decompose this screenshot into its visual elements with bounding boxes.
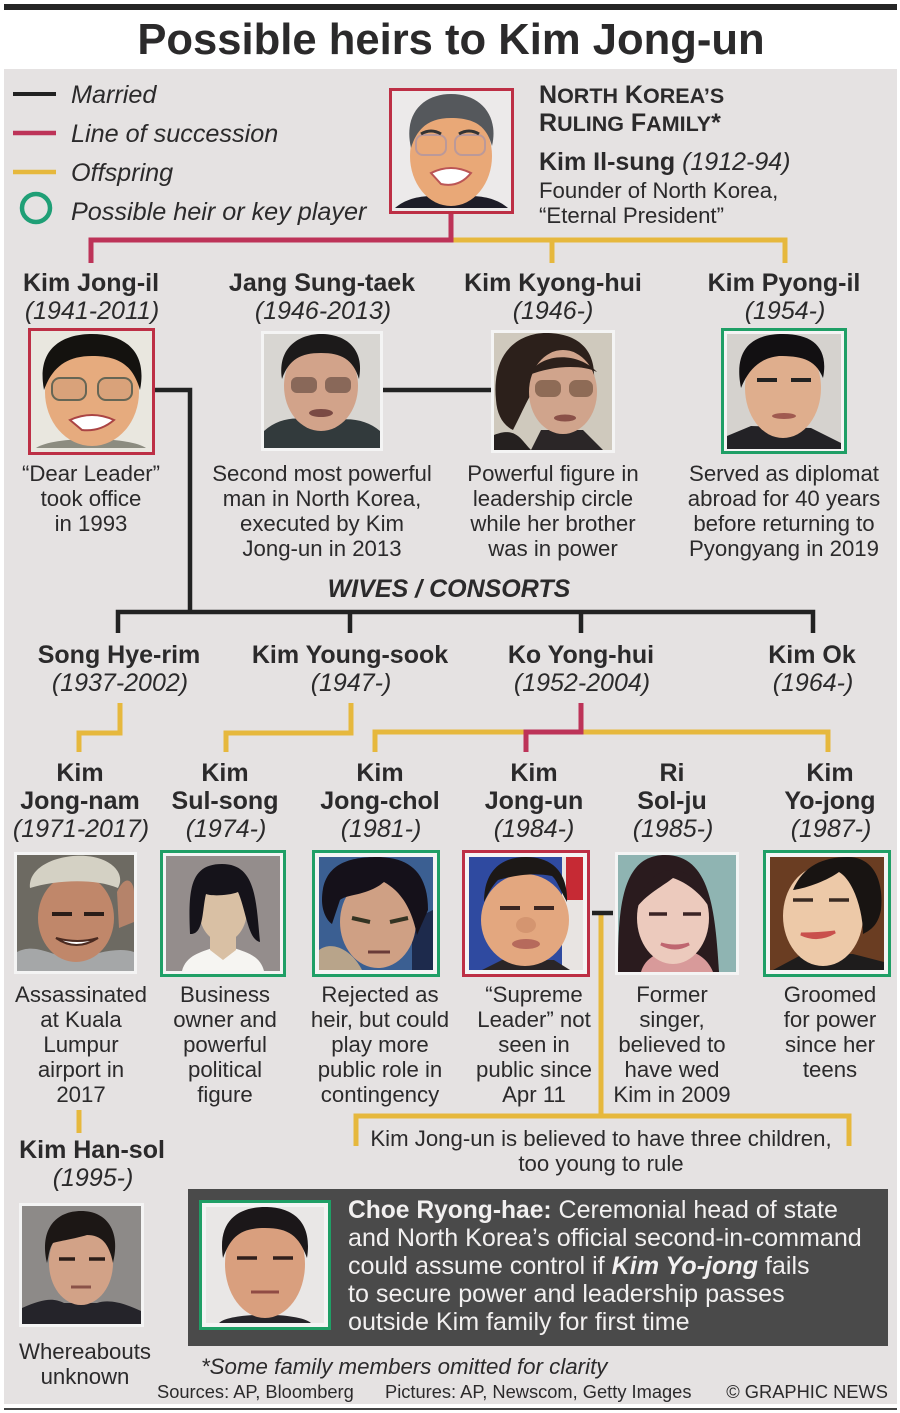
person: Kim Kyong-hui: while her brother	[469, 511, 636, 536]
legend	[13, 81, 368, 226]
wife: Song Hye-rim: (1937-2002)	[52, 669, 188, 697]
photo: Kim Jong-chol	[314, 852, 438, 976]
person: Ri Sol-ju: Former	[636, 982, 708, 1007]
person: Ri Sol-ju: Kim in 2009	[613, 1082, 731, 1107]
note: Kim Jong-un's children: Kim Jong-un is believed to have three children,	[370, 1126, 832, 1151]
person: Kim Jong-il: in 1993	[55, 511, 127, 536]
person: Kim Jong-il: Kim Jong-il	[23, 269, 159, 297]
photo: Kim Jong-un	[464, 852, 588, 976]
person: Jang Sung-taek: (1946-2013)	[255, 297, 391, 325]
person: Kim Sul-song: (1974-)	[186, 815, 266, 843]
person: Ri Sol-ju: believed to	[618, 1032, 726, 1057]
panel: Choe Ryong-hae: could assume control if Kim Yo-jong fails	[348, 1252, 810, 1280]
person: Kim Jong-un: Apr 11	[502, 1082, 566, 1107]
photo: Kim Kyong-hui	[491, 330, 615, 453]
panel: Choe Ryong-hae	[188, 1189, 888, 1346]
text: Kim Il-sung: “Eternal President”	[539, 203, 724, 228]
person: Kim Jong-chol: Rejected as	[321, 982, 439, 1007]
person: Kim Jong-un: Kim	[510, 759, 558, 787]
person: Kim Jong-chol: public role in	[318, 1057, 442, 1082]
person: Kim Jong-un: seen in	[498, 1032, 570, 1057]
person: Kim Jong-nam: 2017	[56, 1082, 106, 1107]
person: Kim Jong-il: took office	[41, 486, 141, 511]
person: Kim Sul-song: owner and	[173, 1007, 277, 1032]
person: Kim Pyong-il: Kim Pyong-il	[708, 269, 860, 297]
person: Kim Jong-nam: Lumpur	[43, 1032, 119, 1057]
person: Kim Jong-un: public since	[476, 1057, 592, 1082]
heading: North Korea's ruling family: RULING FAMILY*	[539, 109, 721, 137]
person: Kim Han-sol: Kim Han-sol	[19, 1136, 165, 1164]
note: Kim Jong-un's children	[370, 1126, 832, 1176]
panel: Choe Ryong-hae: Choe Ryong-hae: Ceremonial head of state	[348, 1196, 838, 1224]
wife: Ko Yong-hui: (1952-2004)	[514, 669, 650, 697]
person: Kim Kyong-hui: leadership circle	[473, 486, 633, 511]
person: Kim Pyong-il	[688, 269, 880, 561]
person: Kim Jong-un	[464, 759, 592, 1107]
person: Kim Jong-il: “Dear Leader”	[22, 461, 160, 486]
text: Kim Il-sung	[539, 148, 790, 228]
sources and credits: Pictures: AP, Newscom, Getty Images	[385, 1381, 692, 1402]
person: Kim Jong-un: Jong-un	[485, 787, 583, 815]
photo: Jang Sung-taek	[261, 331, 383, 451]
photo: Kim Sul-song silhouette	[162, 852, 284, 976]
person: Kim Kyong-hui: was in power	[487, 536, 618, 561]
person: Kim Sul-song: political	[188, 1057, 262, 1082]
person: Kim Yo-jong: Yo-jong	[784, 787, 876, 815]
photo: Kim Pyong-il	[722, 330, 846, 452]
person: Kim Pyong-il: abroad for 40 years	[688, 486, 880, 511]
sources and credits	[157, 1381, 888, 1402]
sources and credits: © GRAPHIC NEWS	[726, 1381, 888, 1402]
legend: Married	[71, 81, 157, 109]
person: Kim Han-sol: (1995-)	[53, 1164, 133, 1192]
photo: Kim Han-sol	[19, 1203, 144, 1327]
wife: Kim Ok	[768, 641, 856, 697]
person: Kim Jong-chol: play more	[331, 1032, 429, 1057]
person: Kim Jong-nam: Kim	[56, 759, 104, 787]
person: Kim Kyong-hui: Powerful figure in	[467, 461, 639, 486]
person: Kim Pyong-il: before returning to	[693, 511, 875, 536]
person: Jang Sung-taek: Jong-un in 2013	[242, 536, 402, 561]
person: Kim Yo-jong: (1987-)	[791, 815, 871, 843]
person: Ri Sol-ju: Sol-ju	[637, 787, 707, 815]
wife: Ko Yong-hui	[508, 641, 654, 697]
person: Kim Jong-nam: Assassinated	[15, 982, 147, 1007]
person: Kim Pyong-il: Served as diplomat	[689, 461, 879, 486]
photo: Kim Il-sung	[390, 90, 512, 212]
person: Jang Sung-taek: executed by Kim	[240, 511, 404, 536]
wife: Ko Yong-hui: Ko Yong-hui	[508, 641, 654, 669]
person: Ri Sol-ju: singer,	[639, 1007, 705, 1032]
photo: Kim Jong-il	[30, 330, 154, 454]
person: Jang Sung-taek	[212, 269, 432, 561]
person: Kim Jong-nam: at Kuala	[40, 1007, 122, 1032]
text: Kim Il-sung: Kim Il-sung (1912-94)	[539, 148, 790, 176]
person: Kim Jong-chol: heir, but could	[311, 1007, 449, 1032]
note: Kim Jong-un's children: too young to rule	[518, 1151, 684, 1176]
person: Kim Pyong-il: (1954-)	[745, 297, 825, 325]
person: Kim Jong-un: (1984-)	[494, 815, 574, 843]
photo: Ri Sol-ju	[615, 852, 739, 975]
heading: North Korea's ruling family	[539, 81, 724, 137]
connector lines: married	[118, 390, 813, 913]
person: Kim Jong-nam: (1971-2017)	[13, 815, 149, 843]
person: Kim Sul-song	[162, 759, 284, 1107]
person: Kim Kyong-hui	[464, 269, 642, 561]
person: Kim Jong-il	[22, 269, 160, 536]
person: Kim Jong-un: Leader” not	[477, 1007, 591, 1032]
legend: Offspring	[71, 159, 173, 187]
person: Kim Sul-song: Business	[180, 982, 270, 1007]
heading: North Korea's ruling family: NORTH KOREA’S	[539, 81, 724, 109]
person: Kim Yo-jong: since her	[785, 1032, 876, 1057]
person: Kim Pyong-il: Pyongyang in 2019	[689, 536, 879, 561]
person: Kim Sul-song: Sul-song	[172, 787, 278, 815]
person: Ri Sol-ju: Ri	[660, 759, 684, 787]
person: Kim Kyong-hui: Kim Kyong-hui	[464, 269, 642, 297]
wife: Kim Ok: (1964-)	[773, 669, 853, 697]
wife: Kim Young-sook: Kim Young-sook	[252, 641, 448, 669]
connector lines: line of succession	[91, 214, 581, 752]
person: Kim Jong-nam: Jong-nam	[20, 787, 140, 815]
person: Ri Sol-ju: have wed	[625, 1057, 719, 1082]
person: Kim Yo-jong	[764, 759, 890, 1082]
person: Kim Sul-song: powerful	[183, 1032, 267, 1057]
panel: Choe Ryong-hae: outside Kim family for first time	[348, 1308, 690, 1336]
person: Kim Jong-un: “Supreme	[485, 982, 583, 1007]
wife: Kim Young-sook	[252, 641, 448, 697]
person: Jang Sung-taek: Jang Sung-taek	[229, 269, 415, 297]
sources and credits: Sources: AP, Bloomberg	[157, 1381, 354, 1402]
panel: Choe Ryong-hae: and North Korea’s official second-in-command	[348, 1224, 862, 1252]
title: Possible heirs to Kim Jong-un	[137, 16, 765, 64]
person: Kim Jong-il: (1941-2011)	[25, 297, 159, 325]
photo: Kim Jong-nam	[14, 852, 137, 974]
person: Kim Yo-jong: for power	[784, 1007, 877, 1032]
connector lines: offspring	[79, 240, 849, 1146]
person: Kim Jong-chol: Jong-chol	[320, 787, 440, 815]
person: Jang Sung-taek: Second most powerful	[212, 461, 432, 486]
person: Kim Sul-song: figure	[197, 1082, 253, 1107]
wife: Kim Ok: Kim Ok	[768, 641, 856, 669]
person: Kim Jong-nam	[13, 759, 149, 1107]
photo: Kim Yo-jong	[764, 852, 890, 976]
person: Kim Jong-nam: airport in	[38, 1057, 124, 1082]
photo: Choe Ryong-hae	[200, 1202, 330, 1328]
heading: wives / consorts: WIVES / CONSORTS	[328, 575, 571, 603]
person: Kim Jong-chol	[311, 759, 449, 1107]
legend: Line of succession	[71, 120, 278, 148]
legend: Possible heir or key player	[71, 198, 368, 226]
person: Kim Yo-jong: Kim	[806, 759, 854, 787]
person: Ri Sol-ju	[613, 759, 739, 1107]
person: Kim Jong-chol: Kim	[356, 759, 404, 787]
person: Kim Jong-chol: contingency	[321, 1082, 440, 1107]
person: Ri Sol-ju: (1985-)	[633, 815, 713, 843]
wife: Kim Young-sook: (1947-)	[311, 669, 391, 697]
wife: Song Hye-rim: Song Hye-rim	[38, 641, 200, 669]
person: Kim Sul-song: Kim	[201, 759, 249, 787]
person: Kim Jong-chol: (1981-)	[341, 815, 421, 843]
footnote: *Some family members omitted for clarity	[201, 1354, 609, 1379]
text: Kim Il-sung: Founder of North Korea,	[539, 178, 778, 203]
person: Kim Yo-jong: teens	[803, 1057, 857, 1082]
person: Kim Han-sol: Whereabouts	[19, 1339, 151, 1364]
person: Kim Han-sol: unknown	[41, 1364, 129, 1389]
person: Jang Sung-taek: man in North Korea,	[223, 486, 421, 511]
person: Kim Yo-jong: Groomed	[784, 982, 876, 1007]
person: Kim Han-sol	[19, 1136, 165, 1389]
wife: Song Hye-rim	[38, 641, 200, 697]
panel: Choe Ryong-hae: to secure power and leadership passes	[348, 1280, 785, 1308]
person: Kim Kyong-hui: (1946-)	[513, 297, 593, 325]
